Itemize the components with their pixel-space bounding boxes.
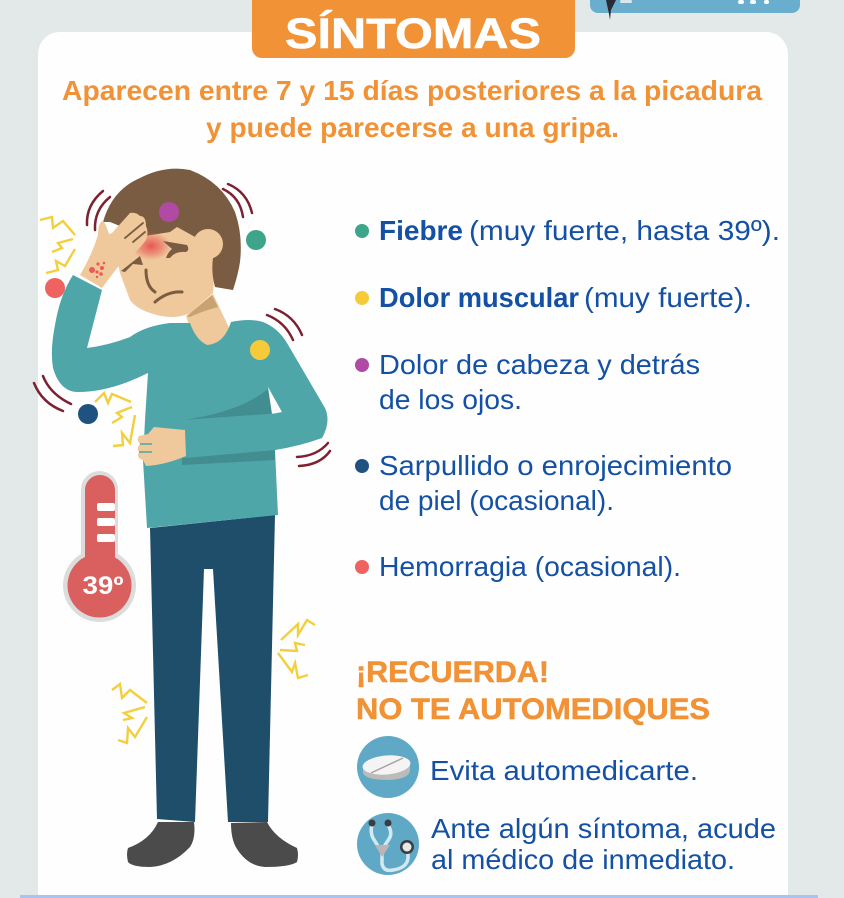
eyes bbox=[121, 241, 188, 272]
text: avoid self-medication: Evita automedicarte. bbox=[430, 755, 698, 786]
symptom: muscle pain: (muy fuerte). bbox=[584, 282, 752, 313]
subtitle bbox=[62, 75, 762, 143]
thermometer bbox=[63, 471, 136, 622]
symptom: fever: Fiebre bbox=[379, 215, 463, 246]
symptom dots bbox=[45, 202, 270, 424]
text: see the doctor: Ante algún síntoma, acude bbox=[431, 813, 776, 844]
bottom panel edge bbox=[20, 895, 818, 898]
thermometer: 39º bbox=[82, 572, 124, 600]
pants bbox=[150, 515, 275, 822]
symptom: headache: Dolor de cabeza y detrás bbox=[379, 349, 700, 380]
illustration: sick person bbox=[34, 169, 330, 867]
title bbox=[252, 0, 575, 58]
finger lines bbox=[125, 223, 145, 242]
sleeve fold bbox=[183, 408, 327, 458]
pain lightning bbox=[40, 217, 315, 743]
shirt bbox=[52, 275, 327, 528]
reminder heading: NO TE AUTOMEDIQUES bbox=[356, 693, 710, 726]
icon: pill bbox=[357, 736, 419, 798]
subtitle: y puede parecerse a una gripa. bbox=[206, 112, 619, 143]
top right blue tab bbox=[590, 0, 800, 20]
nose and mouth bbox=[146, 270, 182, 302]
ear bbox=[193, 229, 223, 259]
symptom: rash: de piel (ocasional). bbox=[379, 485, 614, 516]
neck bbox=[186, 294, 231, 346]
icon: stethoscope bbox=[357, 813, 419, 875]
symptom: fever: (muy fuerte, hasta 39º). bbox=[469, 215, 780, 246]
symptom: hemorrhage: Hemorragia (ocasional). bbox=[379, 551, 681, 582]
symptom: muscle pain: Dolor muscular bbox=[379, 282, 579, 313]
pain shake lines bbox=[34, 184, 330, 466]
text: see the doctor bbox=[431, 813, 776, 875]
arm gap bbox=[268, 387, 282, 414]
reminder heading bbox=[356, 656, 710, 726]
symptom: muscle pain bbox=[355, 282, 752, 313]
symptom: headache bbox=[355, 349, 700, 415]
raised hand bbox=[80, 213, 148, 288]
symptom: rash bbox=[355, 450, 732, 516]
hair bbox=[103, 169, 241, 290]
symptom: rash: Sarpullido o enrojecimiento bbox=[379, 450, 732, 481]
text: see the doctor: al médico de inmediato. bbox=[431, 844, 735, 875]
rash bbox=[89, 262, 105, 278]
title: SÍNTOMAS bbox=[285, 10, 541, 58]
subtitle: Aparecen entre 7 y 15 días posteriores a la picadura bbox=[62, 75, 762, 106]
symptom: fever bbox=[355, 215, 780, 246]
face bbox=[118, 222, 214, 317]
reminder heading: ¡RECUERDA! bbox=[356, 656, 549, 689]
forehead redness bbox=[131, 232, 171, 260]
shirt shadow bbox=[182, 389, 275, 465]
lower hand bbox=[138, 427, 186, 466]
shoes bbox=[127, 822, 298, 867]
symptom: headache: de los ojos. bbox=[379, 384, 522, 415]
